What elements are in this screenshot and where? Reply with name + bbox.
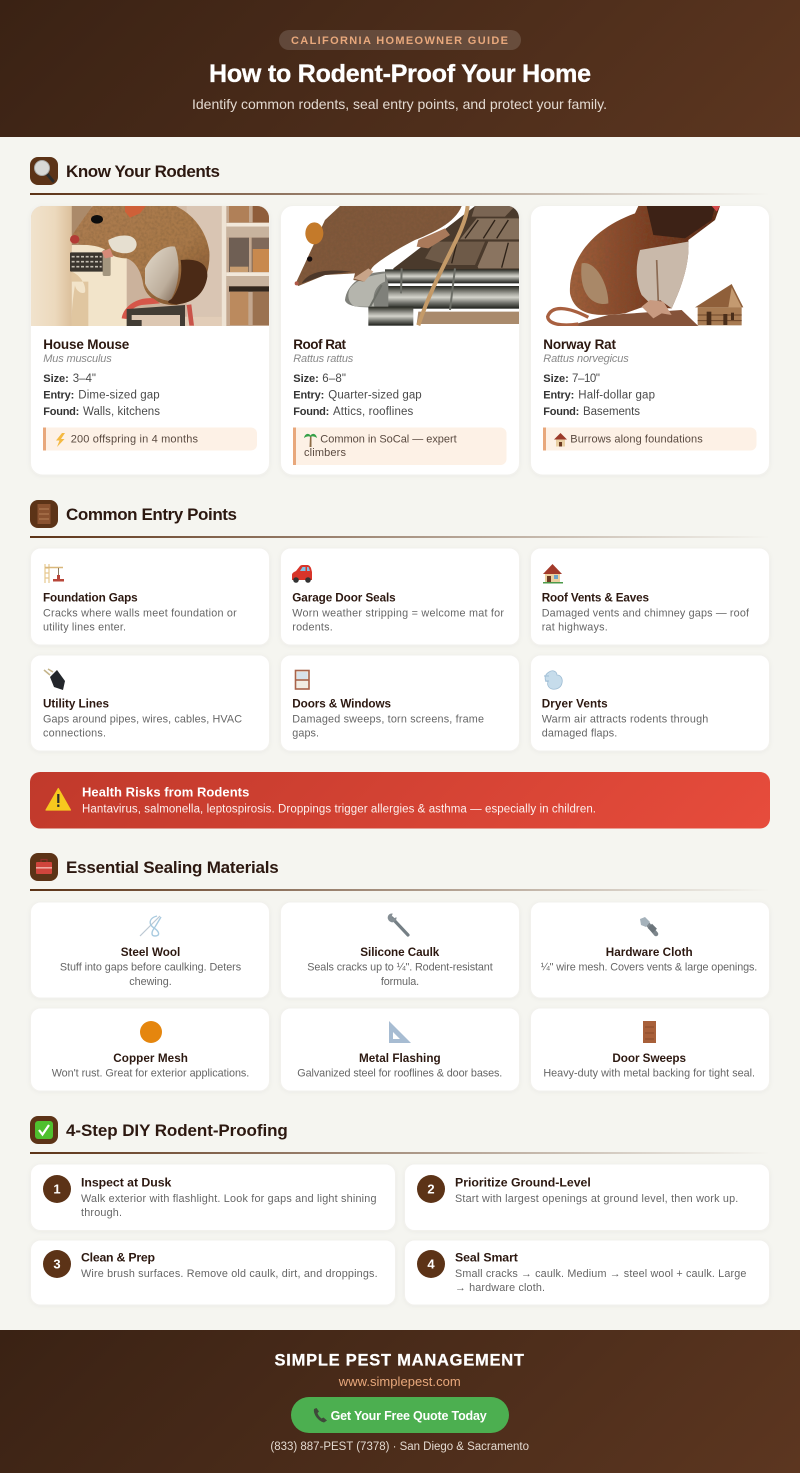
icon: house xyxy=(543,564,563,584)
step number 2 xyxy=(417,1175,445,1203)
step 1: Inspect at Dusk: through. xyxy=(81,1207,122,1219)
material card: Silicone Caulk: formula. xyxy=(381,976,419,988)
material card: Copper Mesh: Copper Mesh xyxy=(113,1052,188,1065)
entry card: Garage Door Seals: Worn weather stripping = welcome mat for xyxy=(292,608,504,620)
material card: Metal Flashing xyxy=(280,1008,520,1091)
icon: nut and bolt xyxy=(640,917,657,934)
facts list xyxy=(543,373,655,418)
icon: copper circle xyxy=(140,1021,162,1043)
material card: Copper Mesh: Won't rust. Great for exterior applications. xyxy=(52,1068,249,1080)
species name and Latin name xyxy=(43,337,130,365)
facts list: Entry: xyxy=(293,390,324,402)
alert banner: health risks xyxy=(30,772,770,828)
step 1: Inspect at Dusk xyxy=(30,1164,396,1230)
facts list: Entry: xyxy=(43,390,74,402)
material card: Metal Flashing: Metal Flashing xyxy=(359,1052,441,1065)
facts list xyxy=(43,373,160,418)
step number 4: 4 xyxy=(427,1256,435,1272)
entry card: Roof Vents & Eaves: rat highways. xyxy=(542,622,608,634)
website: www.simplepest.com xyxy=(338,1374,461,1389)
step number 3: 3 xyxy=(53,1256,61,1272)
step 4: Seal Smart xyxy=(404,1240,770,1305)
facts list: Found: xyxy=(43,406,79,418)
species name and Latin name: Rattus norvegicus xyxy=(543,353,629,365)
material card: Steel Wool xyxy=(30,902,270,998)
entry card: Roof Vents & Eaves xyxy=(530,548,770,645)
step number 2: 2 xyxy=(427,1182,435,1196)
step 1: Inspect at Dusk: Walk exterior with flashlight. Look for gaps and light shining xyxy=(81,1193,376,1205)
entry card: Doors & Windows: gaps. xyxy=(292,728,319,740)
step 2: Prioritize Ground-Level: Prioritize Ground-Level xyxy=(455,1176,591,1190)
illustration: roof rat climbing over a gutter xyxy=(281,206,519,326)
icon: toolbox xyxy=(36,860,52,874)
callout: offspring fact xyxy=(43,428,257,450)
entry card: Dryer Vents: Dryer Vents xyxy=(542,698,608,711)
material card: Door Sweeps: Heavy-duty with metal backing for tight seal. xyxy=(543,1068,755,1080)
step 4: Seal Smart: Seal Smart xyxy=(455,1251,518,1265)
facts list: Found: xyxy=(543,406,579,418)
illustration: house mouse on a stand beside pantry shelves xyxy=(30,205,270,327)
section heading: Essential Sealing Materials: Essential Sealing Materials xyxy=(66,858,279,877)
section heading: 4-Step DIY Rodent-Proofing: 4-Step DIY Rodent-Proofing xyxy=(66,1121,288,1140)
entry card: Utility Lines: Gaps around pipes, wires, cables, HVAC xyxy=(43,714,242,726)
entry card: Foundation Gaps xyxy=(30,548,270,645)
contact line: (833) 887-PEST (7378) · San Diego & Sacramento xyxy=(270,1441,529,1453)
section heading: 4-Step DIY Rodent-Proofing xyxy=(30,1116,770,1154)
facts list: Size: xyxy=(543,373,569,385)
callout: SoCal climbers xyxy=(293,428,506,465)
badge: California Homeowner Guide xyxy=(279,30,521,50)
title: How to Rodent-Proof Your Home xyxy=(209,60,591,88)
material card: Door Sweeps: Door Sweeps xyxy=(612,1052,687,1065)
material card: Silicone Caulk xyxy=(280,902,520,998)
facts list: Size: xyxy=(293,373,319,385)
icon: magnifying glass xyxy=(34,160,53,181)
entry card: Doors & Windows: Damaged sweeps, torn screens, frame xyxy=(292,714,484,726)
entry card: Roof Vents & Eaves: Roof Vents & Eaves xyxy=(542,592,649,605)
entry card: Foundation Gaps: Foundation Gaps xyxy=(43,592,138,605)
species name and Latin name xyxy=(293,337,354,365)
panel: House Mouse card xyxy=(30,205,270,475)
entry card: Doors & Windows: Doors & Windows xyxy=(292,698,391,711)
icon: needle and thread xyxy=(140,916,161,936)
facts list: Half-dollar gap xyxy=(578,390,655,402)
step 4: Seal Smart: Small cracks → caulk. Medium → steel wool + caulk. Large xyxy=(455,1268,746,1280)
footer xyxy=(0,1330,800,1473)
badge: California Homeowner Guide: CALIFORNIA HOMEOWNER GUIDE xyxy=(291,35,508,47)
icon: red car xyxy=(292,565,312,583)
alert banner: health risks: Health Risks from Rodents xyxy=(82,785,249,800)
step number 4 xyxy=(417,1250,445,1278)
step 3: Clean & Prep: Clean & Prep xyxy=(81,1251,155,1265)
call-to-action button xyxy=(291,1397,509,1433)
step 4: Seal Smart: → hardware cloth. xyxy=(455,1282,545,1294)
facts list: Size: xyxy=(43,373,69,385)
facts list: Found: xyxy=(293,406,329,418)
section heading: Common Entry Points: Common Entry Points xyxy=(66,505,237,524)
panel: materials grid xyxy=(30,902,770,1091)
material card: Steel Wool: Steel Wool xyxy=(121,946,180,959)
callout: SoCal climbers: climbers xyxy=(304,447,346,459)
section heading: Know Your Rodents: Know Your Rodents xyxy=(66,162,220,181)
icon: set square xyxy=(389,1021,411,1043)
section heading: Common Entry Points xyxy=(30,500,770,538)
icon: palm tree xyxy=(304,434,317,447)
species name and Latin name: Rattus rattus xyxy=(293,353,354,365)
panel: Norway Rat card xyxy=(530,206,770,475)
species name and Latin name: Norway Rat xyxy=(543,337,616,352)
facts list: Basements xyxy=(583,406,640,418)
icon: telephone xyxy=(314,1408,327,1422)
material card: Door Sweeps xyxy=(530,1008,770,1091)
callout: offspring fact: 200 offspring in 4 months xyxy=(71,433,198,445)
material card: Silicone Caulk: Seals cracks up to ¼". Rodent-resistant xyxy=(307,962,493,974)
facts list: Attics, rooflines xyxy=(333,406,414,418)
illustration: Norway rat beside a small house xyxy=(531,206,769,326)
facts list: Dime-sized gap xyxy=(78,390,160,402)
panel: Roof Rat card xyxy=(280,206,520,475)
entry card: Utility Lines: connections. xyxy=(43,728,106,740)
entry card: Roof Vents & Eaves: Damaged vents and chimney gaps — roof xyxy=(542,608,750,620)
step number 3 xyxy=(43,1250,71,1278)
step 2: Prioritize Ground-Level: Start with largest openings at ground level, then work up. xyxy=(455,1193,738,1205)
step 1: Inspect at Dusk: Inspect at Dusk xyxy=(81,1176,172,1190)
callout: burrows xyxy=(543,428,756,450)
species name and Latin name xyxy=(543,337,629,365)
call-to-action button: Get Your Free Quote Today xyxy=(331,1409,487,1423)
icon: window xyxy=(296,670,309,689)
icon: plug xyxy=(44,669,65,690)
step number 1: 1 xyxy=(53,1182,61,1196)
icon: warning triangle xyxy=(46,788,70,810)
icon: crane xyxy=(45,564,64,583)
facts list: Quarter-sized gap xyxy=(328,390,422,402)
material card: Steel Wool: chewing. xyxy=(129,976,172,988)
facts list: 6–8" xyxy=(322,373,346,385)
material card: Hardware Cloth: ¼" wire mesh. Covers vents & large openings. xyxy=(541,962,757,974)
section heading: Essential Sealing Materials xyxy=(30,853,770,891)
step 3: Clean & Prep: Wire brush surfaces. Remove old caulk, dirt, and droppings. xyxy=(81,1268,378,1280)
entry card: Foundation Gaps: utility lines enter. xyxy=(43,622,126,634)
entry card: Garage Door Seals: Garage Door Seals xyxy=(292,592,396,605)
facts list: Walls, kitchens xyxy=(83,406,160,418)
icon: green check xyxy=(35,1121,53,1139)
facts list: 7–10" xyxy=(572,373,600,385)
material card: Silicone Caulk: Silicone Caulk xyxy=(360,946,440,959)
entry card: Dryer Vents: Warm air attracts rodents through xyxy=(542,714,708,726)
icon: door xyxy=(38,504,50,524)
subtitle: Identify common rodents, seal entry points, and protect your family. xyxy=(192,96,607,112)
step 2: Prioritize Ground-Level xyxy=(404,1164,770,1230)
entry card: Dryer Vents: damaged flaps. xyxy=(542,728,617,740)
icon: lightning bolt xyxy=(56,433,65,447)
material card: Metal Flashing: Galvanized steel for rooflines & door bases. xyxy=(297,1068,502,1080)
alert banner: health risks: Hantavirus, salmonella, leptospirosis. Droppings trigger allergies & asthma — especially in children. xyxy=(82,804,596,816)
callout: SoCal climbers: Common in SoCal — expert xyxy=(320,433,457,445)
material card: Hardware Cloth xyxy=(530,902,770,998)
entry card: Foundation Gaps: Cracks where walls meet foundation or xyxy=(43,608,237,620)
header banner xyxy=(0,0,800,137)
entry card: Garage Door Seals: rodents. xyxy=(292,622,333,634)
species name and Latin name: Roof Rat xyxy=(293,337,346,352)
panel: entry points grid xyxy=(30,548,770,751)
entry card: Utility Lines: Utility Lines xyxy=(43,698,109,711)
entry card: Doors & Windows xyxy=(280,655,520,751)
entry card: Utility Lines xyxy=(30,655,270,751)
material card: Steel Wool: Stuff into gaps before caulking. Deters xyxy=(60,962,242,974)
material card: Hardware Cloth: Hardware Cloth xyxy=(606,946,693,959)
species name and Latin name: House Mouse xyxy=(43,337,130,352)
facts list: 3–4" xyxy=(73,373,96,385)
icon: wrench xyxy=(388,914,408,935)
facts list xyxy=(293,373,422,418)
company name: SIMPLE PEST MANAGEMENT xyxy=(274,1352,524,1370)
section heading: Know Your Rodents xyxy=(30,157,770,195)
icon: puff of air xyxy=(544,671,562,689)
panel: steps grid xyxy=(30,1164,770,1305)
icon: door xyxy=(643,1021,656,1043)
species name and Latin name: Mus musculus xyxy=(43,353,112,365)
step number 1 xyxy=(43,1175,71,1203)
step 3: Clean & Prep xyxy=(30,1240,396,1305)
material card: Copper Mesh xyxy=(30,1008,270,1091)
entry card: Dryer Vents xyxy=(530,655,770,751)
callout: burrows: Burrows along foundations xyxy=(570,433,703,445)
facts list: Entry: xyxy=(543,390,574,402)
entry card: Garage Door Seals xyxy=(280,548,520,645)
icon: house xyxy=(554,433,567,446)
